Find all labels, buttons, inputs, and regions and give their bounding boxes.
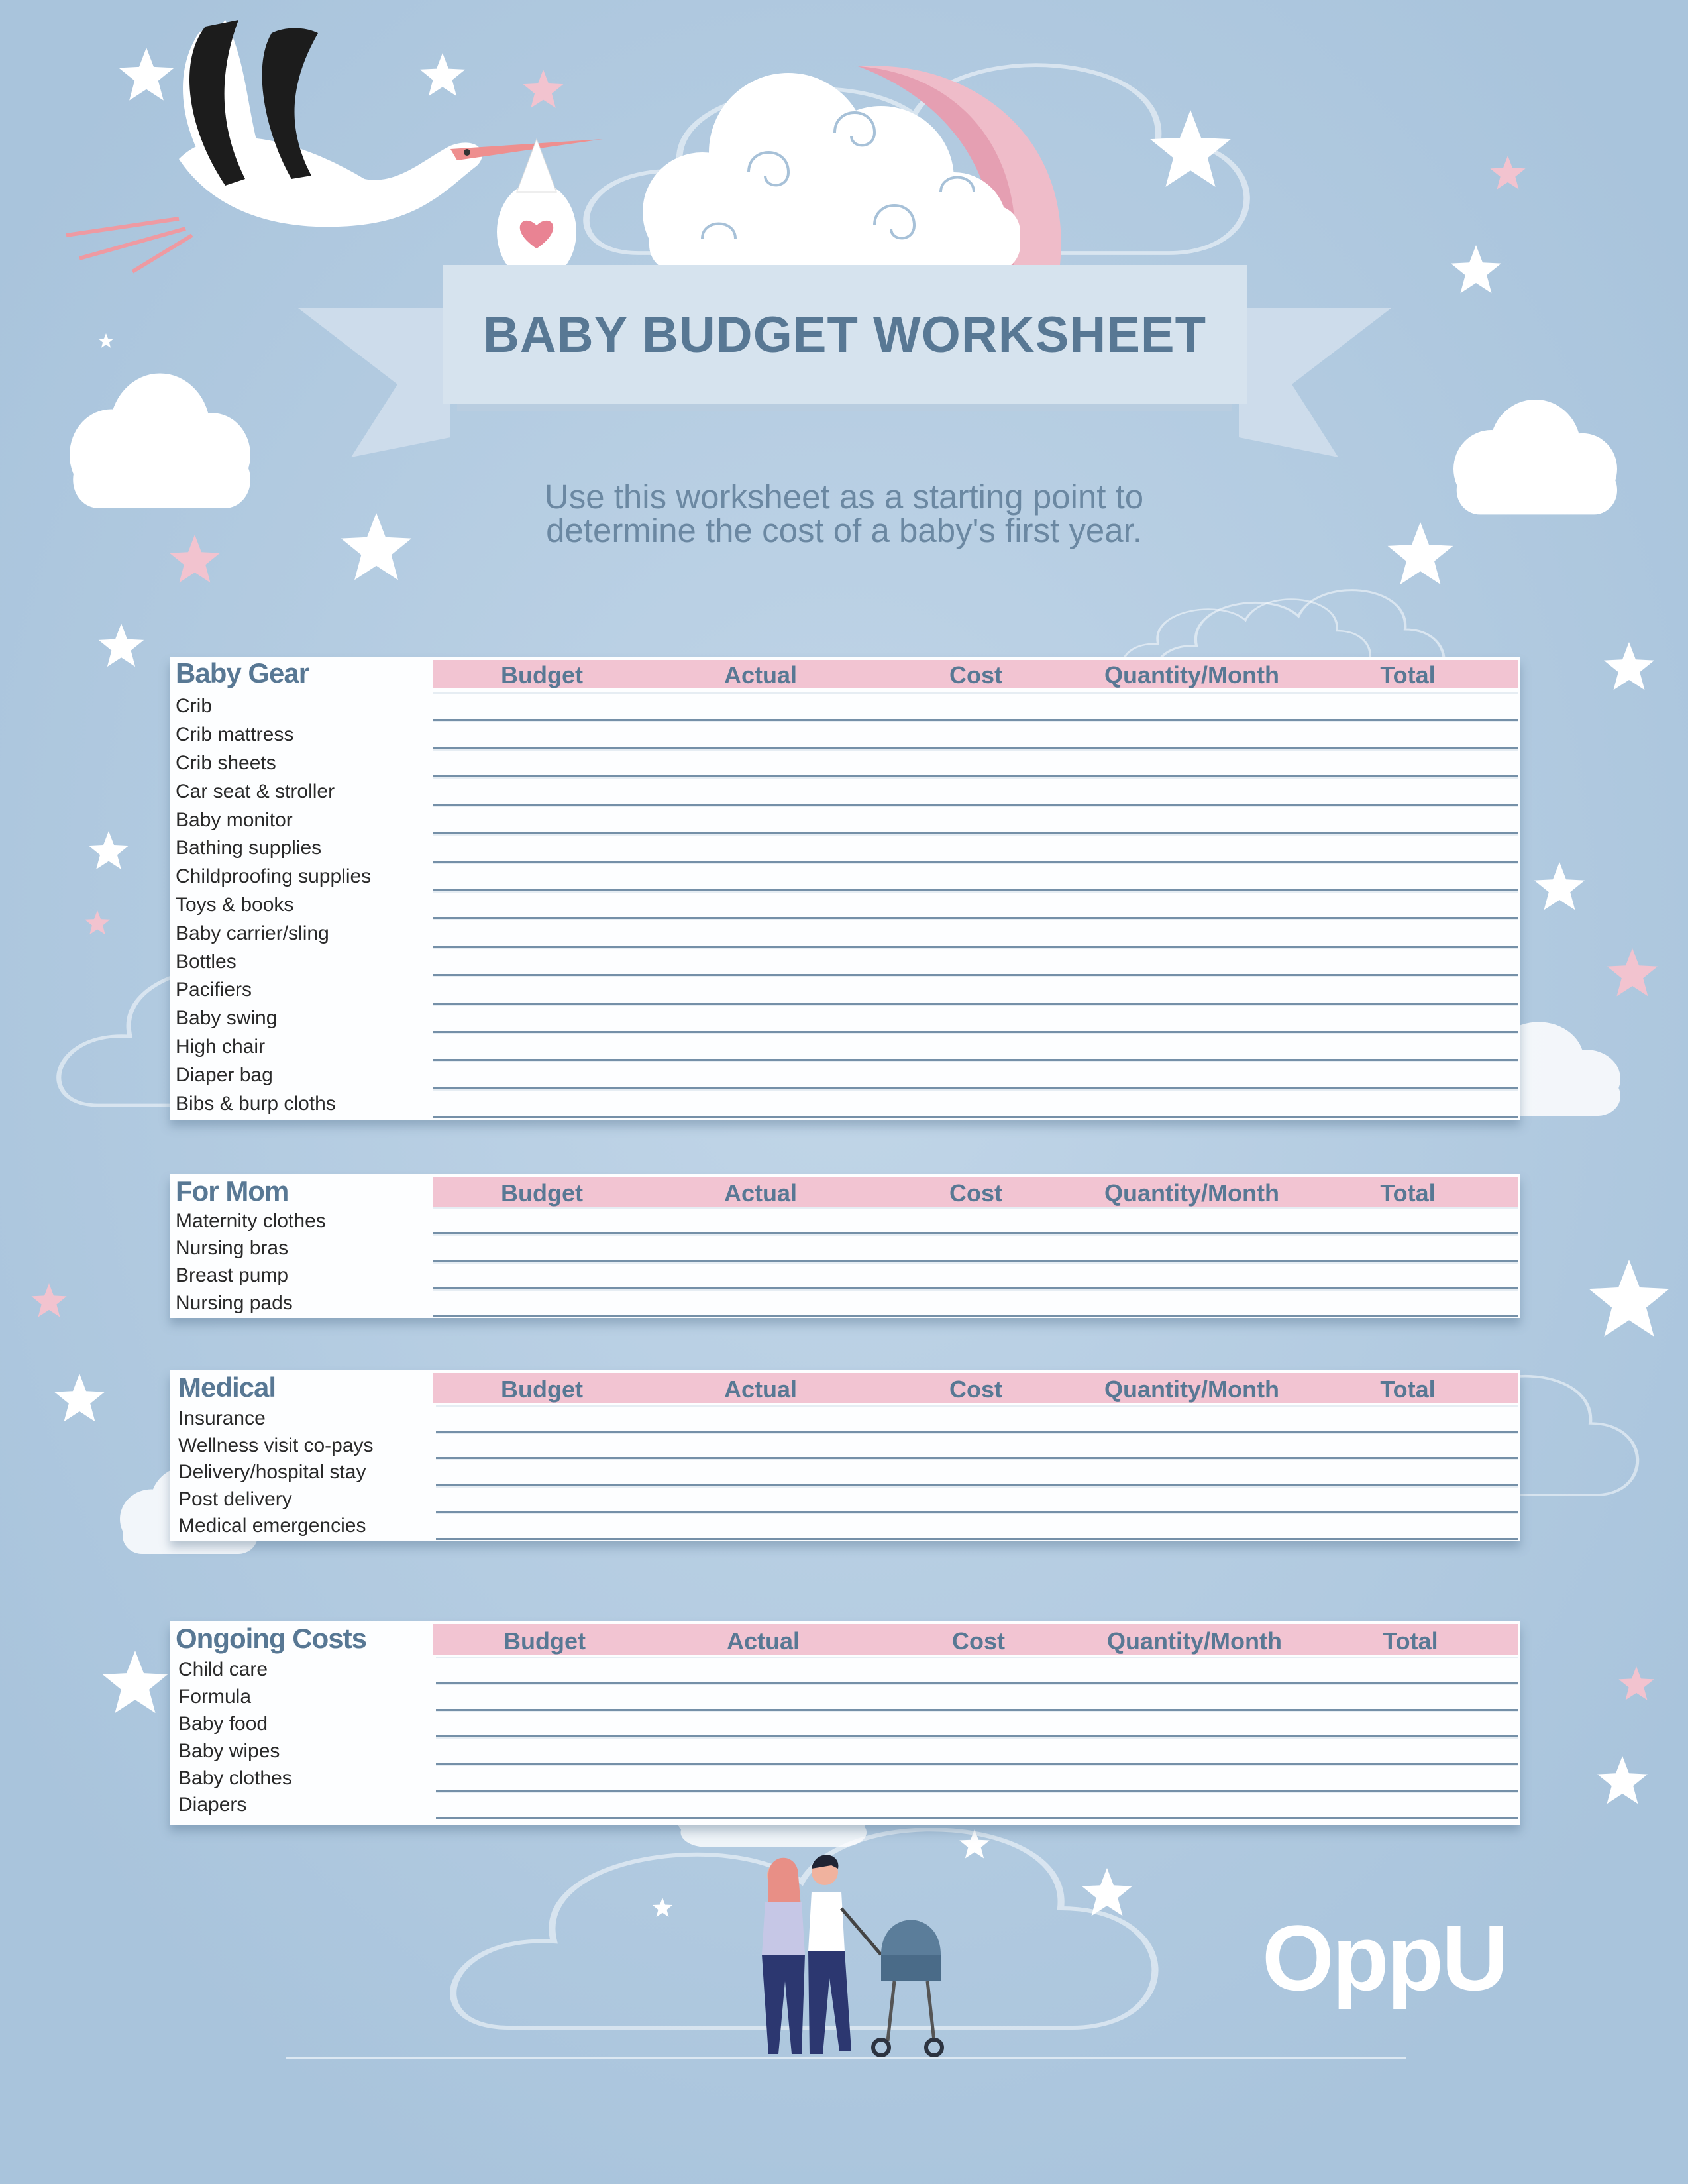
panel: Baby Gear: Bibs & burp cloths: [176, 1093, 336, 1115]
panel: Baby Gear: Car seat & stroller: [176, 781, 335, 802]
panel: Ongoing Costs: Baby food: [178, 1713, 268, 1735]
moon and main cloud: [643, 66, 1061, 265]
panel: For Mom: Breast pump: [176, 1264, 288, 1286]
panel: For Mom: Budget: [501, 1179, 583, 1207]
panel: Ongoing Costs: Baby clothes: [178, 1767, 292, 1789]
icon: family with stroller: [762, 1855, 944, 2057]
subtitle: [545, 478, 1143, 549]
panel: Medical: Budget: [501, 1376, 583, 1403]
panel: Baby Gear: Bathing supplies: [176, 837, 321, 859]
panel: For Mom: [170, 1174, 1520, 1318]
panel: Baby Gear: Toys & books: [176, 894, 293, 916]
panel: Medical: Wellness visit co-pays: [178, 1435, 374, 1456]
panel: Medical: Medical emergencies: [178, 1515, 366, 1537]
panel: For Mom: Actual: [724, 1179, 797, 1207]
panel: Ongoing Costs: [170, 1621, 1520, 1825]
ground line: [286, 2057, 1406, 2059]
panel: For Mom: Cost: [949, 1179, 1002, 1207]
panel: For Mom: Quantity/Month: [1104, 1179, 1279, 1207]
panel: Baby Gear: [170, 657, 1520, 1120]
subtitle: determine the cost of a baby's first year.: [546, 512, 1142, 549]
panel: Ongoing Costs: Formula: [178, 1686, 251, 1708]
panel: Ongoing Costs: Diapers: [178, 1794, 246, 1816]
panel: Ongoing Costs: Actual: [727, 1627, 800, 1655]
panel: Baby Gear: Crib: [176, 695, 212, 717]
panel: Medical: Medical: [178, 1372, 276, 1403]
panel: Baby Gear: Pacifiers: [176, 979, 252, 1001]
panel: Ongoing Costs: Cost: [952, 1627, 1005, 1655]
panel: For Mom: Total: [1380, 1179, 1436, 1207]
panel: Baby Gear: Total: [1380, 661, 1436, 688]
panel: Baby Gear: Bottles: [176, 951, 237, 973]
panel: Ongoing Costs: Baby wipes: [178, 1740, 280, 1762]
panel: Medical: Delivery/hospital stay: [178, 1461, 366, 1483]
logo: OppU: OppU: [1262, 1906, 1506, 2010]
white clouds: [70, 373, 1620, 1847]
panel: Baby Gear: Crib sheets: [176, 752, 276, 774]
panel: Baby Gear: Baby monitor: [176, 809, 293, 831]
panel: Baby Gear: Crib mattress: [176, 724, 293, 745]
stars pink: [31, 70, 1658, 1700]
panel: For Mom: Nursing bras: [176, 1237, 288, 1259]
panel: Ongoing Costs: Ongoing Costs: [176, 1623, 366, 1654]
icon: stork: [66, 20, 603, 273]
title banner: [298, 265, 1391, 457]
panel: Medical: [170, 1370, 1520, 1541]
panel: Medical: Cost: [949, 1376, 1002, 1403]
subtitle: Use this worksheet as a starting point to: [545, 478, 1143, 516]
panel: Baby Gear: Actual: [724, 661, 797, 688]
panel: Medical: Total: [1380, 1376, 1436, 1403]
panel: Baby Gear: Quantity/Month: [1104, 661, 1279, 688]
panel: Ongoing Costs: Budget: [503, 1627, 586, 1655]
panel: For Mom: Maternity clothes: [176, 1210, 326, 1232]
panel: Ongoing Costs: Quantity/Month: [1107, 1627, 1282, 1655]
panel: Baby Gear: Baby Gear: [176, 657, 309, 688]
panel: For Mom: Nursing pads: [176, 1292, 293, 1314]
panel: Medical: Quantity/Month: [1104, 1376, 1279, 1403]
panel: Medical: Insurance: [178, 1407, 266, 1429]
panel: Baby Gear: Baby swing: [176, 1007, 277, 1029]
title: BABY BUDGET WORKSHEET: [483, 307, 1206, 363]
panel: Ongoing Costs: Total: [1383, 1627, 1438, 1655]
panel: Medical: Post delivery: [178, 1488, 292, 1510]
panel: Baby Gear: Childproofing supplies: [176, 865, 371, 887]
panel: Baby Gear: Diaper bag: [176, 1064, 273, 1086]
panel: For Mom: For Mom: [176, 1175, 288, 1207]
panel: Baby Gear: Budget: [501, 661, 583, 688]
panel: Baby Gear: High chair: [176, 1036, 265, 1058]
panel: Medical: Actual: [724, 1376, 797, 1403]
panel: Baby Gear: Cost: [949, 661, 1002, 688]
panel: Baby Gear: Baby carrier/sling: [176, 922, 329, 944]
panel: Ongoing Costs: Child care: [178, 1659, 268, 1680]
